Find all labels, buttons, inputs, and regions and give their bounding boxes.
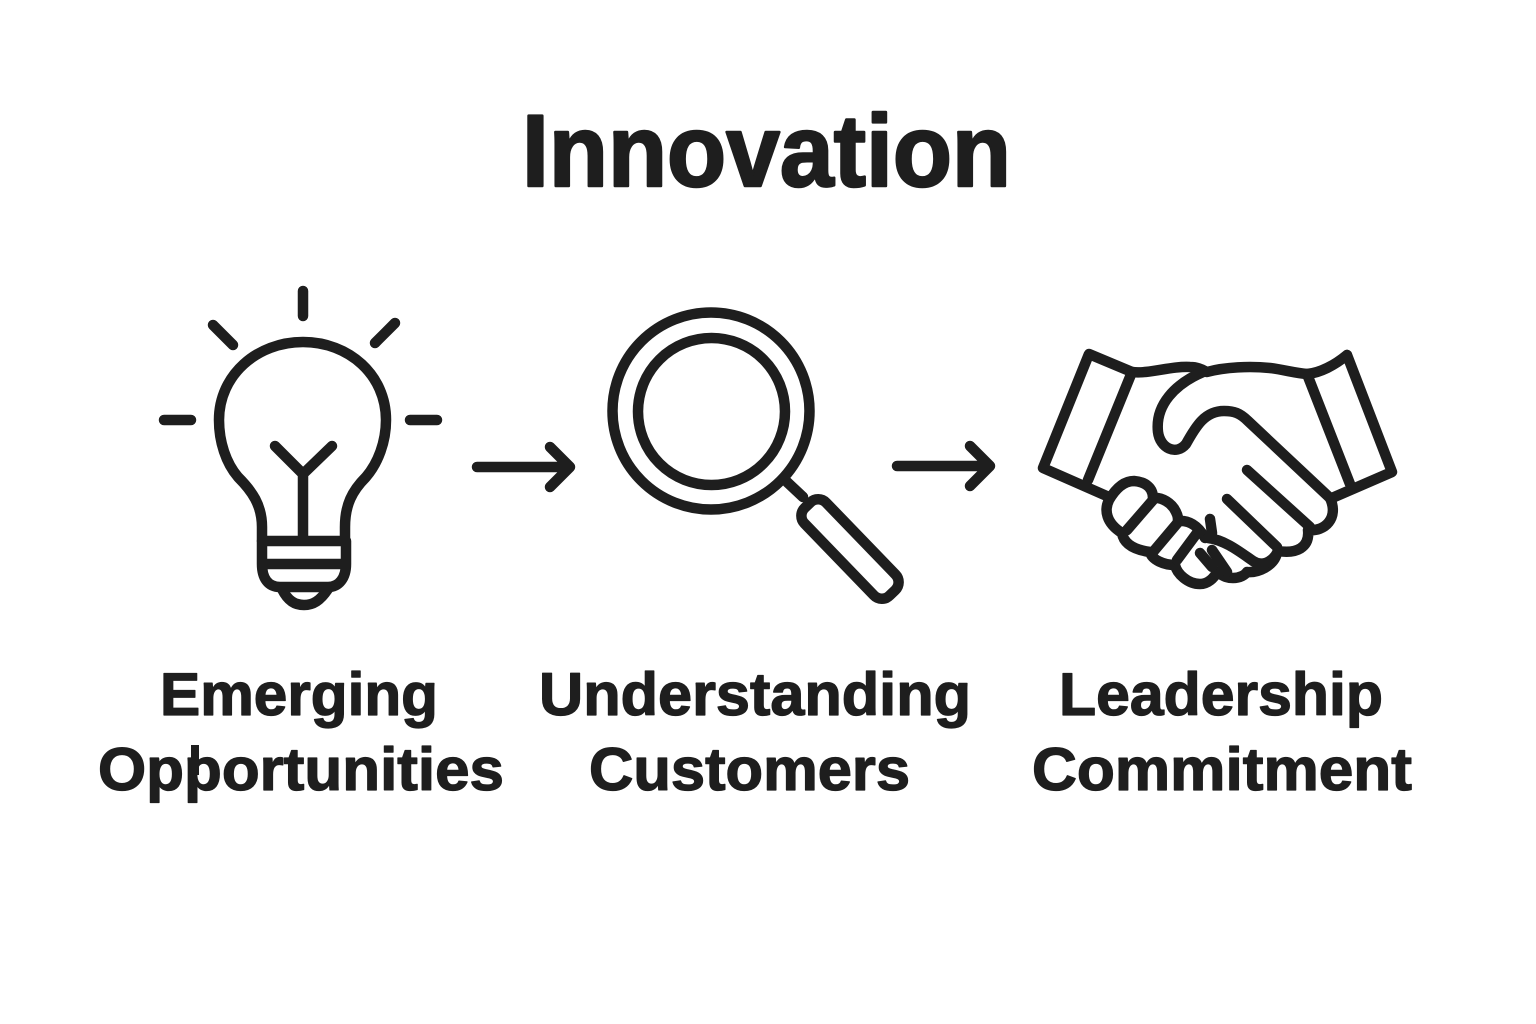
label: Understanding Customers: Understanding <box>539 661 971 728</box>
left finger separators <box>1127 500 1212 567</box>
clasped fingertips <box>1208 519 1277 572</box>
left cuff <box>1043 354 1132 497</box>
label: Emerging Opportunities: Opportunities <box>98 736 504 803</box>
label: Leadership Commitment: Leadership <box>1059 661 1383 728</box>
bulb glass outline <box>219 342 386 541</box>
left fingers outline <box>1107 481 1277 584</box>
handle neck <box>787 482 803 497</box>
bulb rays <box>164 291 437 420</box>
label: Understanding Customers <box>539 661 971 803</box>
top of hands <box>1132 355 1347 374</box>
right fingertips <box>1278 498 1333 552</box>
title: Innovation <box>522 94 1011 208</box>
label: Leadership Commitment <box>1032 661 1412 803</box>
handle <box>797 495 903 603</box>
icon: magnifying glass <box>612 312 903 603</box>
label: Leadership Commitment: Commitment <box>1032 736 1412 803</box>
right cuff <box>1307 355 1392 498</box>
right fingers <box>1227 470 1310 547</box>
bulb filament <box>275 446 332 537</box>
label: Emerging Opportunities <box>98 661 504 803</box>
icon: light bulb <box>164 291 437 605</box>
arrow: bulb to magnifier <box>477 447 570 487</box>
bulb cap <box>282 589 328 605</box>
inner lens ring <box>638 338 785 485</box>
bulb screw base <box>262 541 346 587</box>
label: Emerging Opportunities: Emerging <box>160 661 438 728</box>
thumb and palm <box>1158 372 1330 498</box>
label: Understanding Customers: Customers <box>589 736 910 803</box>
outer lens ring <box>612 312 810 510</box>
arrow: magnifier to handshake <box>897 446 990 486</box>
icon: handshake <box>1043 354 1392 584</box>
